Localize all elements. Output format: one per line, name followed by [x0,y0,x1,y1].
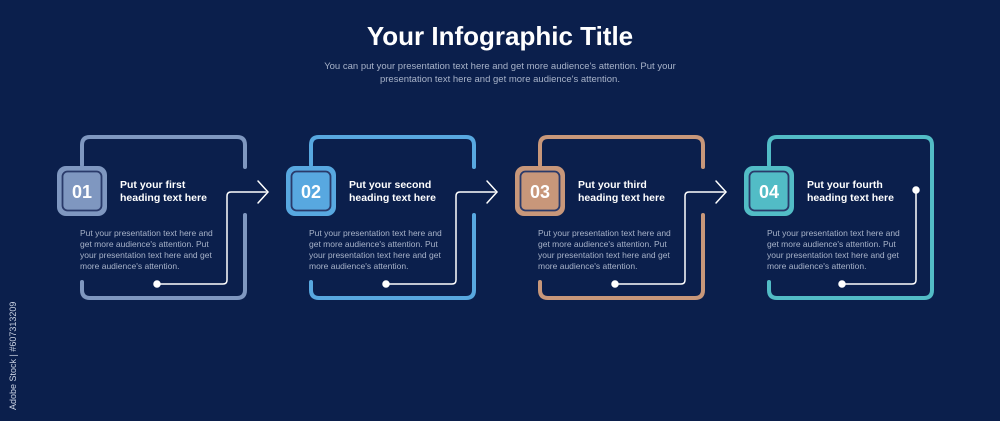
heading 4 [807,179,894,204]
body 2: Put your presentation text here and get more audience's attention. Put your presentation text here and get more audience's attention. [309,228,442,271]
frame 4 [769,137,932,298]
connector arrow 1 [154,181,268,287]
heading 4: heading text here [807,192,894,204]
heading 1: heading text here [120,192,207,204]
step 1 [82,137,268,298]
body 3: Put your presentation text here and get more audience's attention. Put your presentation text here and get more audience's attention. [538,228,671,271]
connector line 4 [839,187,919,287]
frame 2 [311,137,474,298]
heading 4: Put your fourth [807,179,883,191]
heading 3 [578,179,665,204]
step 4 [769,137,932,298]
heading 3: Put your third [578,179,647,191]
badge 03: 03 [530,182,550,202]
heading 3: heading text here [578,192,665,204]
badge 01: 01 [72,182,92,202]
subtitle: You can put your presentation text here and get more audience's attention. Put your presentation text here and get more audience's attention. [324,61,676,85]
connector arrow 3 [612,181,726,287]
body 1: Put your presentation text here and get more audience's attention. Put your presentation text here and get more audience's attention. [80,228,213,271]
step 2 [311,137,497,298]
step 3 [540,137,726,298]
badge 04 [744,166,794,216]
connector arrow 2 [383,181,497,287]
badge 04: 04 [759,182,779,202]
badge 01 [57,166,107,216]
heading 2: Put your second [349,179,431,191]
side credit: Adobe Stock | #607313209 [8,302,18,410]
heading 1: Put your first [120,179,185,191]
frame 1 [82,137,245,298]
badge 03 [515,166,565,216]
title: Your Infographic Title [367,21,633,51]
badge 02 [286,166,336,216]
heading 2: heading text here [349,192,436,204]
badge 02: 02 [301,182,321,202]
heading 2 [349,179,436,204]
frame 3 [540,137,703,298]
heading 1 [120,179,207,204]
body 4: Put your presentation text here and get more audience's attention. Put your presentation text here and get more audience's attention. [767,228,900,271]
